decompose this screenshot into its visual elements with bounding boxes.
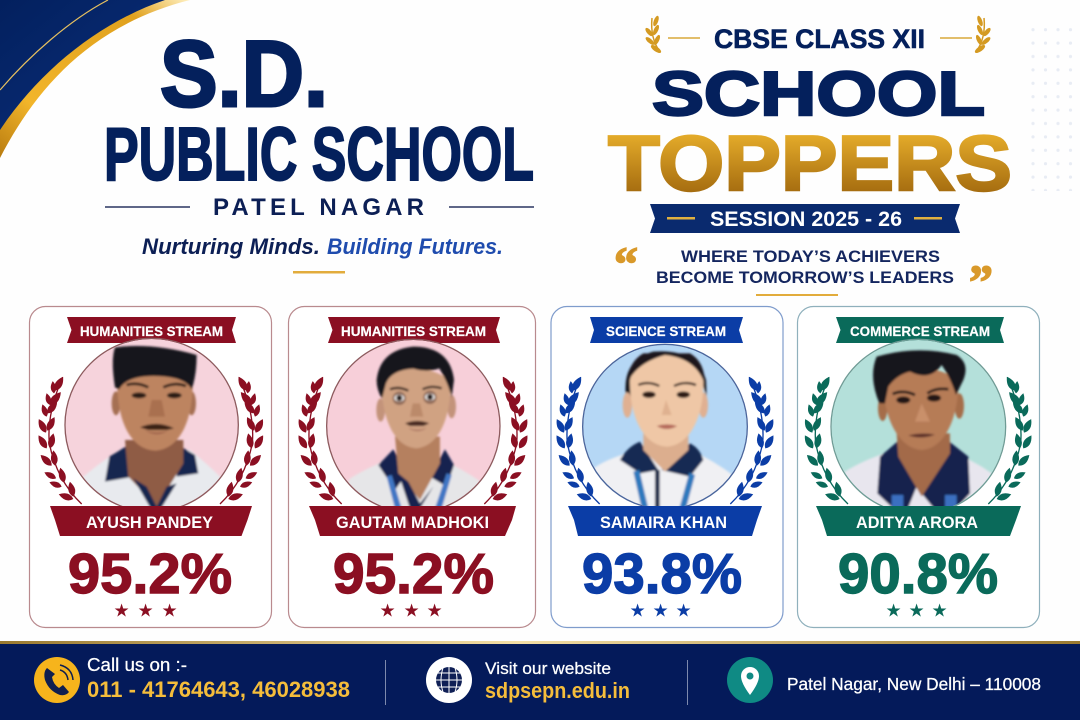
name banner: GAUTAM MADHOKI — [336, 513, 489, 532]
quotation: BECOME TOMORROW’S LEADERS — [656, 268, 954, 287]
school name block — [104, 21, 534, 274]
portrait — [327, 339, 500, 513]
card: Aditya Arora — [798, 306, 1040, 628]
tagline: Building Futures. — [327, 234, 503, 259]
portrait — [827, 339, 1010, 517]
card: Gautam Madhoki — [288, 306, 536, 628]
session ribbon — [650, 204, 960, 233]
icon: location pin — [727, 657, 773, 703]
school word: SCHOOL — [652, 60, 985, 129]
contact: phone: Call us on :- — [87, 655, 187, 675]
name banner — [816, 506, 1021, 536]
card: Ayush Pandey — [30, 306, 272, 628]
stars: ★★★ — [380, 600, 443, 622]
icon: globe — [426, 657, 472, 703]
percentage: 90.8% — [838, 542, 998, 606]
card: Samaira Khan — [551, 306, 783, 628]
laurel wreath — [296, 375, 530, 504]
contact: phone — [34, 655, 350, 703]
contact: phone: 011 - 41764643, 46028938 — [87, 677, 350, 702]
laurel wreath — [802, 375, 1034, 504]
portrait — [65, 338, 238, 513]
stream banner: HUMANITIES STREAM — [341, 323, 486, 339]
class label with laurels: CBSE CLASS XII — [714, 24, 925, 54]
stars: ★★★ — [114, 600, 178, 622]
tagline: Nurturing Minds. — [142, 234, 320, 259]
stream banner — [836, 317, 1004, 343]
toppers word: TOPPERS — [608, 119, 1012, 207]
name banner: SAMAIRA KHAN — [600, 513, 727, 532]
name banner: AYUSH PANDEY — [86, 513, 214, 532]
contact: website: Visit our website — [485, 659, 611, 678]
laurel wreath — [554, 375, 776, 504]
percentage: 93.8% — [582, 542, 742, 606]
school name: PUBLIC SCHOOL — [104, 112, 534, 196]
percentage: 95.2% — [68, 542, 232, 606]
percentage: 95.2% — [333, 542, 494, 606]
name banner — [50, 506, 252, 536]
stream banner: SCIENCE STREAM — [606, 323, 726, 339]
corner swoosh — [0, 0, 190, 158]
stream banner: HUMANITIES STREAM — [80, 323, 223, 339]
stream banner — [328, 317, 500, 343]
laurel wreath — [36, 375, 266, 504]
stars: ★★★ — [630, 600, 692, 622]
class label with laurels — [644, 15, 992, 54]
tagline — [142, 234, 503, 259]
stream banner — [590, 317, 743, 343]
footer bar — [0, 641, 1080, 720]
session ribbon: SESSION 2025 - 26 — [710, 208, 902, 231]
location line: PATEL NAGAR — [213, 194, 424, 221]
icon: phone — [34, 657, 80, 703]
portrait — [577, 344, 753, 513]
quotation: ” — [969, 256, 993, 309]
toppers heading block — [608, 15, 1012, 309]
stream banner: COMMERCE STREAM — [850, 323, 990, 339]
school initials: S.D. — [160, 21, 328, 126]
stars: ★★★ — [886, 600, 948, 622]
decorative dot grid — [1030, 23, 1076, 191]
contact: website: sdpsepn.edu.in — [485, 678, 630, 703]
quotation — [614, 238, 993, 309]
name banner — [309, 506, 516, 536]
name banner: ADITYA ARORA — [856, 513, 978, 532]
contact: website — [426, 657, 630, 703]
name banner — [568, 506, 762, 536]
contact: address — [727, 657, 1041, 703]
contact: address: Patel Nagar, New Delhi – 110008 — [787, 674, 1041, 694]
quotation: “ — [614, 238, 638, 291]
stream banner — [67, 317, 236, 343]
quotation: WHERE TODAY’S ACHIEVERS — [681, 247, 940, 266]
